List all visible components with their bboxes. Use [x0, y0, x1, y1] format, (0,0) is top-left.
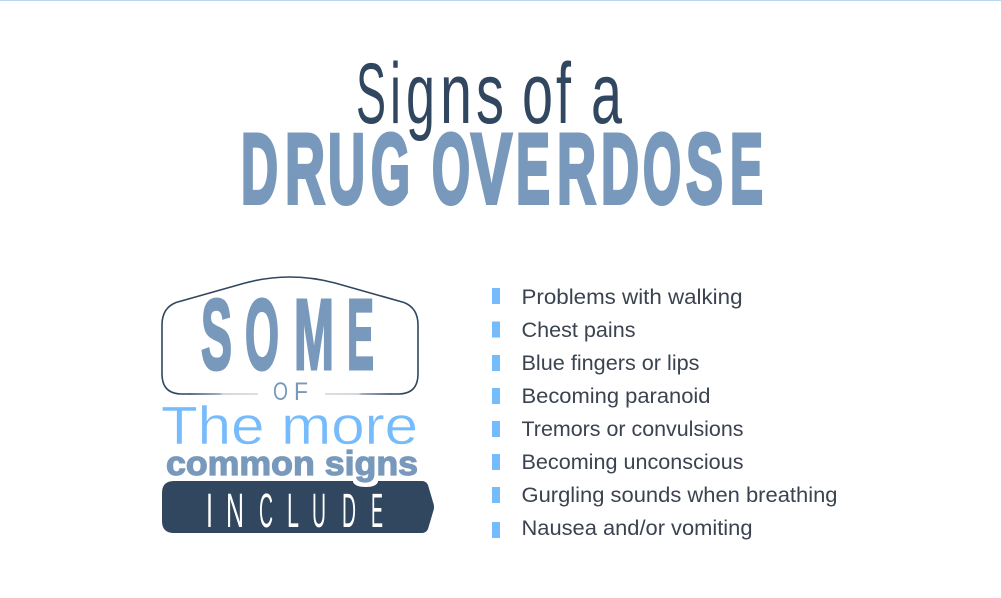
text: E [730, 113, 763, 224]
text: common signs: common signs [166, 445, 418, 483]
item: problems with walking: Problems with walking [522, 286, 742, 309]
item: becoming unconscious: Becoming unconscious [522, 451, 744, 474]
title line 2: DRUG OVERDOSE: D [601, 113, 639, 224]
title line 2: DRUG OVERDOSE: R [557, 113, 596, 224]
title line 1: Signs of a: n [440, 46, 472, 142]
word: INCLUDE: I [206, 485, 213, 538]
badge: some of the more common signs include [161, 277, 434, 538]
item: gurgling sounds when breathing: Gurgling sounds when breathing [522, 484, 838, 507]
ribbon notch for descender [353, 478, 378, 487]
title line 2: DRUG OVERDOSE: V [471, 113, 512, 224]
title line 2: DRUG OVERDOSE [241, 113, 763, 224]
title line 1: Signs of a: S [356, 46, 386, 142]
item: blue fingers or lips: Blue fingers or lips [522, 352, 700, 375]
word: INCLUDE: C [259, 485, 273, 538]
title line 1: Signs of a: g [406, 46, 435, 142]
word: INCLUDE: D [342, 485, 356, 538]
signs list [492, 286, 838, 540]
badge: some of the more common signs include: E [347, 279, 374, 391]
word: INCLUDE: L [287, 485, 299, 538]
include ribbon [162, 481, 434, 533]
word: SOME: M [294, 279, 334, 391]
title line 1: Signs of a: a [591, 46, 622, 142]
badge outline [162, 277, 418, 395]
word: INCLUDE [206, 485, 383, 538]
top border line [0, 0, 1001, 1]
item: becoming paranoid: Becoming paranoid [522, 385, 710, 408]
title line 1: Signs of a: o [522, 46, 553, 142]
text: The more: The more [161, 396, 418, 456]
item: chest pains: Chest pains [522, 319, 636, 342]
badge: some of the more common signs include: E [371, 485, 383, 538]
word: SOME: O [245, 279, 279, 391]
word: INCLUDE: U [312, 485, 326, 538]
title line 2: DRUG OVERDOSE: O [643, 113, 681, 224]
title line 2: DRUG OVERDOSE: U [328, 113, 365, 224]
title line 2: DRUG OVERDOSE: S [686, 113, 723, 224]
title line 1: Signs of a: f [556, 46, 572, 142]
word: SOME [201, 279, 374, 391]
word: OF [273, 378, 308, 406]
item: tremors or convulsions: Tremors or convulsions [522, 418, 744, 441]
title line 2: DRUG OVERDOSE: G [371, 113, 410, 224]
title line 1: Signs of a: s [476, 46, 504, 142]
item: nausea and/or vomiting: Nausea and/or vomiting [522, 517, 752, 540]
title line 2: DRUG OVERDOSE: E [516, 113, 550, 224]
title line 2: DRUG OVERDOSE: O [432, 113, 470, 224]
word: INCLUDE: N [226, 485, 244, 538]
word: OF: F [294, 378, 308, 406]
word: OF: O [273, 378, 288, 406]
word: SOME: S [201, 279, 232, 391]
title line 1: Signs of a [356, 46, 622, 142]
title line 2: DRUG OVERDOSE: R [285, 113, 325, 224]
title [241, 46, 763, 224]
title line 2: DRUG OVERDOSE: D [241, 113, 278, 224]
title line 1: Signs of a: i [390, 46, 401, 142]
